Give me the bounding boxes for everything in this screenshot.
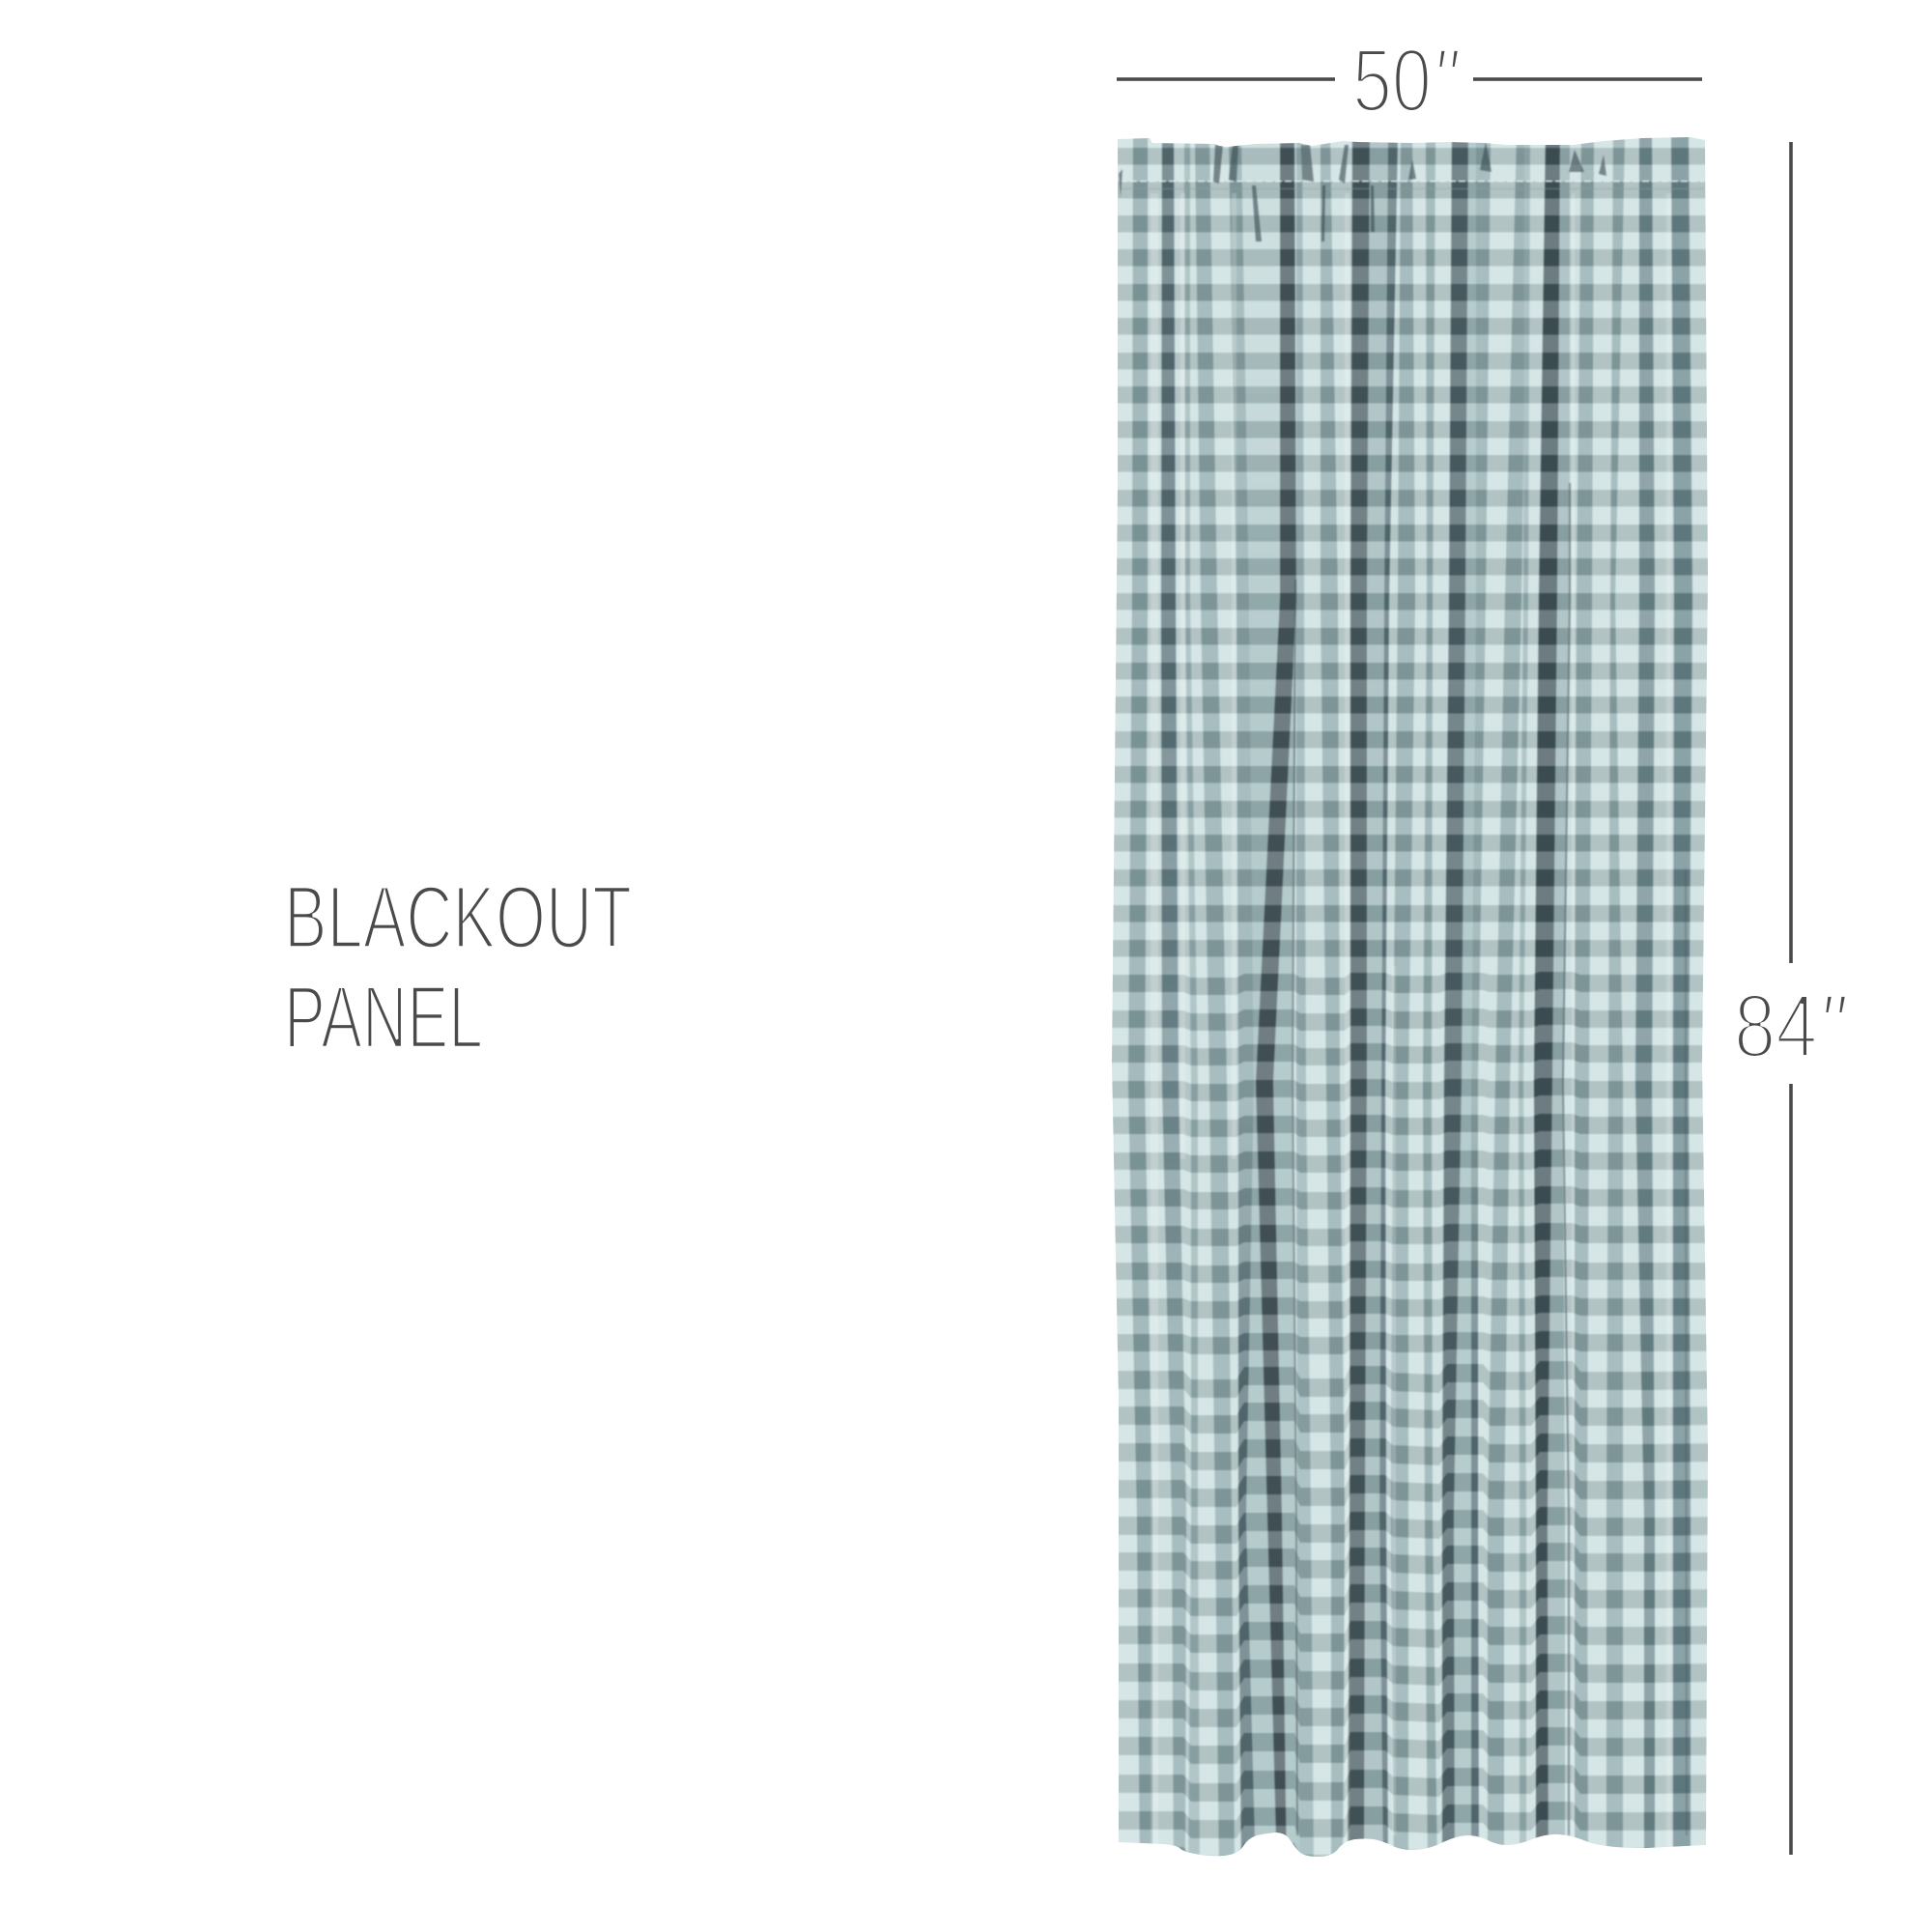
product label: blackout panel	[284, 868, 632, 1066]
fold shadow lines	[1293, 483, 1687, 1835]
horizontal gingham stripes	[1106, 148, 1715, 1874]
curtain panel: gingham check	[1106, 126, 1719, 1874]
width dimension: 50 inches	[1117, 30, 1702, 130]
rod pocket stitching	[1121, 181, 1704, 189]
height dimension: 84 inches	[1734, 142, 1847, 1855]
vertical gingham stripes	[1128, 135, 1692, 1874]
fold highlights	[1151, 193, 1671, 1874]
gathered ruffle pinches	[1119, 142, 1606, 242]
height dimension: 84 inches: 84"	[1734, 976, 1847, 1076]
product label: blackout panel: BLACKOUT	[284, 868, 632, 967]
width dimension: 50 inches: 50"	[1352, 30, 1460, 130]
product label: blackout panel: PANEL	[284, 968, 483, 1066]
